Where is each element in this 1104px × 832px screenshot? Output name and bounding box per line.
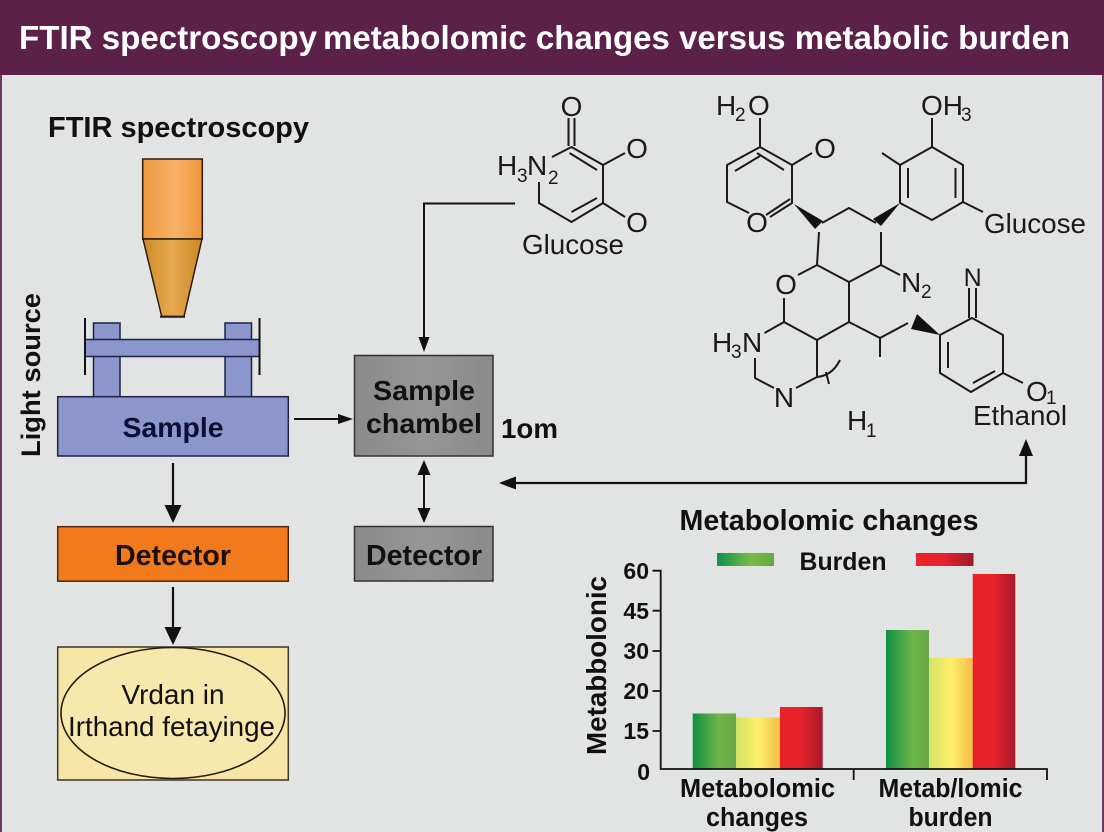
x axis labels	[680, 775, 1022, 832]
box: sample chamber: chambel	[366, 408, 482, 439]
label: light source: Light source	[16, 293, 46, 457]
label: 1om: 1om	[501, 413, 558, 444]
molecule: large structure: O	[775, 269, 797, 300]
box: detector orange	[58, 527, 288, 581]
molecule: large structure: Ethanol	[973, 400, 1067, 431]
molecule: glucose small	[497, 91, 648, 260]
molecule: large structure: 2	[735, 105, 746, 126]
molecule: glucose small: 2	[548, 168, 559, 189]
sample holder	[85, 318, 260, 397]
box: result with ellipse: Vrdan in	[122, 679, 224, 710]
arrow: ethanol to chamber	[499, 439, 1033, 490]
molecule: large structure: H	[712, 327, 732, 358]
y axis numbers: 20	[623, 678, 649, 704]
axes	[652, 571, 1047, 780]
box: detector orange: Detector	[115, 540, 231, 572]
y axis numbers: 60	[623, 558, 649, 584]
box: result with ellipse	[58, 647, 288, 780]
molecule: large structure: N	[774, 382, 794, 413]
molecule: large structure: N	[901, 267, 921, 298]
box: result with ellipse: Irthand fetayinge	[68, 711, 275, 742]
molecule: large structure: H	[847, 405, 867, 436]
molecule: glucose small: N	[527, 150, 547, 181]
icon: light source lamp	[143, 159, 202, 317]
molecule: large structure: 1	[866, 421, 877, 442]
molecule: large structure: Glucose	[984, 208, 1086, 239]
arrow: sample to detector	[164, 463, 182, 523]
molecule: large structure: OH	[921, 90, 963, 121]
x axis labels: Metab/lomic	[878, 775, 1022, 803]
molecule: large structure	[712, 90, 1086, 442]
molecule: large structure: H	[716, 90, 736, 121]
x axis labels: Metabolomic	[680, 775, 835, 803]
molecule: large structure: 3	[731, 342, 742, 363]
molecule: glucose small: O	[626, 207, 648, 238]
arrow: chamber to detector	[418, 460, 430, 523]
y axis title: Metabbolonic	[581, 576, 612, 755]
header banner: FTIR spectroscopy	[19, 19, 318, 56]
molecule: large structure: N	[964, 264, 982, 292]
box: detector grey: Detector	[366, 540, 482, 572]
molecule: glucose small: 3	[517, 166, 528, 187]
x axis labels: burden	[908, 804, 992, 832]
molecule: large structure: O	[748, 90, 770, 121]
legend	[717, 548, 974, 576]
box: detector grey	[354, 526, 493, 581]
molecule: large structure: 1	[1046, 388, 1057, 409]
arrow: sample to chamber	[294, 414, 353, 424]
molecule: glucose small: Glucose	[522, 229, 624, 260]
header banner: metabolomic changes versus metabolic burden	[323, 19, 1070, 56]
molecule: large structure: 2	[921, 282, 932, 303]
heading: FTIR spectroscopy: FTIR spectroscopy	[48, 112, 309, 144]
x axis labels: changes	[706, 804, 808, 832]
arrow: glucose to chamber	[418, 204, 515, 352]
molecule: large structure: O	[814, 133, 836, 164]
y axis numbers: 30	[623, 638, 649, 664]
y axis numbers: 15	[623, 718, 649, 744]
legend: Burden	[800, 548, 886, 576]
arrow: detector to result	[164, 587, 182, 645]
y axis numbers: 0	[637, 759, 650, 785]
chart title: Metabolomic changes	[680, 505, 978, 537]
header banner	[0, 0, 1104, 75]
molecule: glucose small: H	[497, 150, 517, 181]
bar chart	[581, 558, 1047, 832]
box: sample chamber: Sample	[373, 375, 475, 406]
molecule: large structure: 3	[961, 105, 972, 126]
box: sample chamber	[354, 356, 493, 456]
molecule: large structure: N	[742, 327, 762, 358]
molecule: glucose small: O	[561, 91, 582, 122]
box: sample	[58, 397, 288, 456]
box: sample: Sample	[122, 412, 224, 443]
molecule: glucose small: O	[626, 133, 648, 164]
bars: metabolomic changes	[693, 707, 823, 769]
y axis numbers: 45	[623, 598, 649, 624]
y axis numbers	[623, 558, 650, 785]
molecule: large structure: O	[1026, 376, 1048, 407]
bars: metabolomic burden	[886, 574, 1015, 769]
molecule: large structure: O	[746, 207, 768, 238]
